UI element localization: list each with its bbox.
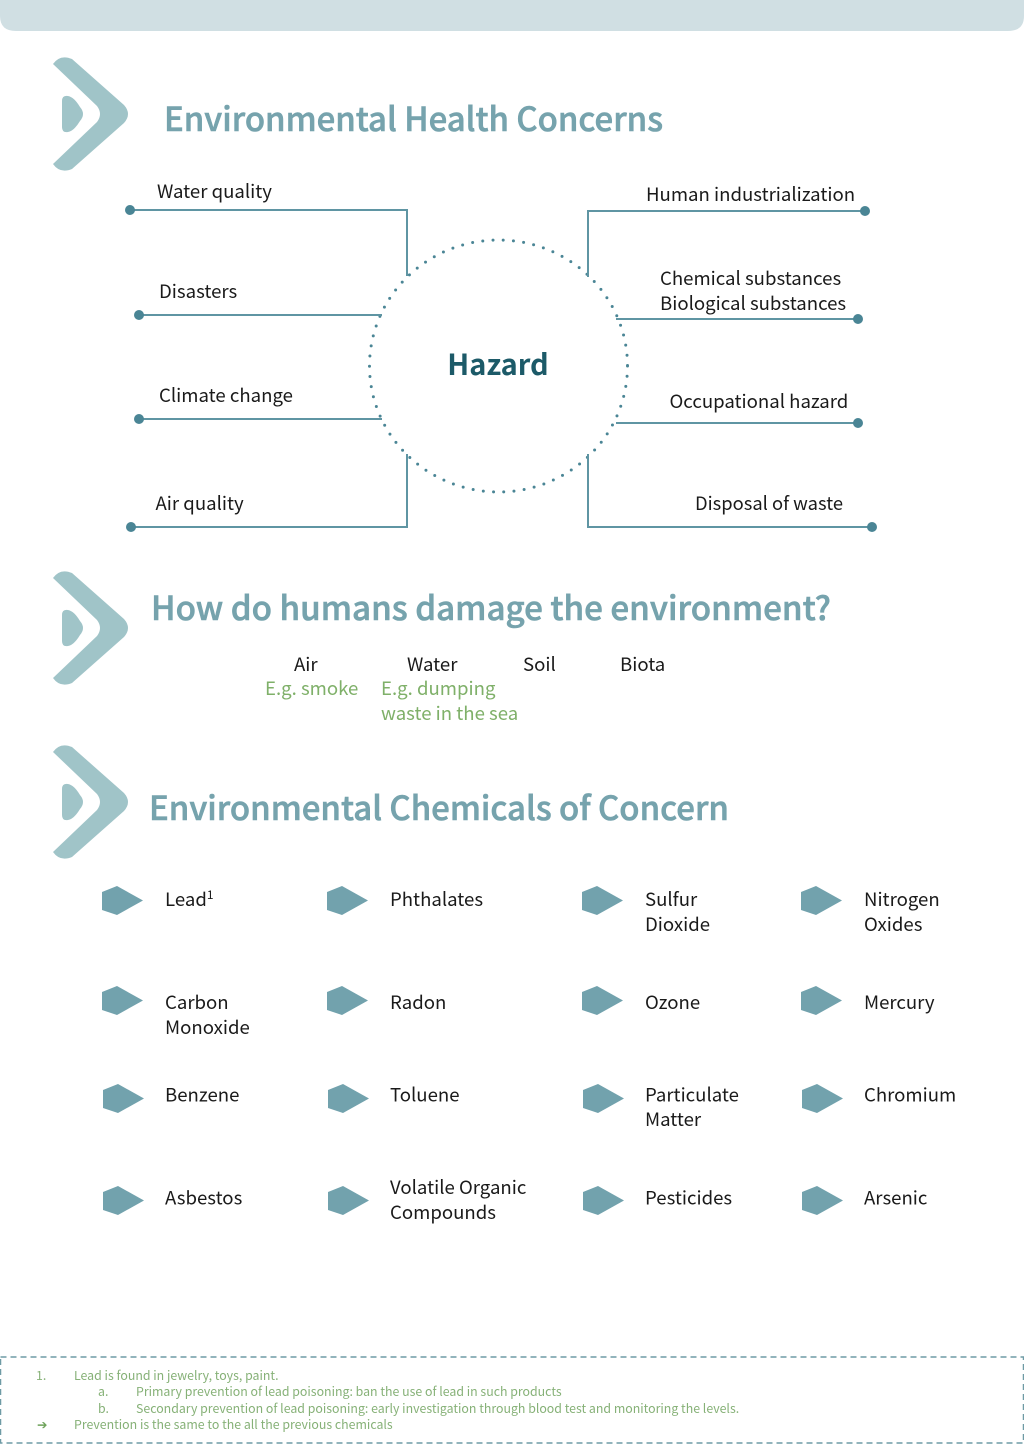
item: Water: Water bbox=[407, 650, 458, 677]
chemical: Ozone bbox=[582, 986, 700, 1015]
chemical: Chromium bbox=[802, 1080, 956, 1113]
item: Water: E.g. dumping bbox=[381, 674, 496, 701]
dotted circle bbox=[370, 240, 628, 492]
chemical: Phthalates: Phthalates bbox=[390, 885, 483, 912]
connector: Chemical and biological substances: Chemical substances bbox=[660, 264, 841, 291]
item: Air: E.g. smoke bbox=[265, 674, 358, 701]
connector: Disasters bbox=[134, 277, 382, 320]
item: Air bbox=[265, 650, 358, 701]
chemicals grid bbox=[102, 885, 956, 1225]
chemical: Carbon Monoxide: Monoxide bbox=[165, 1013, 250, 1040]
connector: Occupational hazard: Occupational hazard bbox=[670, 387, 848, 414]
chemical: Pesticides: Pesticides bbox=[645, 1184, 732, 1210]
chemical: Pesticides bbox=[583, 1184, 732, 1215]
connector: Air quality: Air quality bbox=[156, 489, 244, 516]
chemical: Asbestos bbox=[103, 1184, 243, 1215]
footnote box: Lead is found in jewelry, toys, paint. bbox=[74, 1366, 279, 1384]
chemical: Carbon Monoxide bbox=[102, 986, 250, 1040]
connector: Human industrialization bbox=[588, 180, 870, 277]
footnote box: 1. bbox=[36, 1366, 46, 1384]
chemical: Phthalates bbox=[327, 885, 483, 915]
chemical: Lead: 1 bbox=[207, 886, 214, 903]
chemical: Particulate Matter: Matter bbox=[645, 1105, 702, 1132]
title: Environmental Health Concerns: Environmental Health Concerns bbox=[164, 93, 663, 141]
heading: How do humans damage the environment?: How do humans damage the environment? bbox=[151, 582, 831, 630]
chemical: Nitrogen Oxides bbox=[801, 885, 940, 937]
connector: Water quality: Water quality bbox=[157, 177, 272, 204]
footnote box: ➔ bbox=[37, 1415, 47, 1433]
chemical: Ozone: Ozone bbox=[645, 988, 700, 1015]
chemical: Lead bbox=[102, 885, 214, 915]
connector: Water quality bbox=[125, 177, 407, 276]
chemical: Toluene bbox=[328, 1080, 460, 1113]
chemical: Nitrogen Oxides: Oxides bbox=[864, 910, 923, 937]
footnote box: Prevention is the same to the all the previous chemicals bbox=[74, 1415, 393, 1433]
chemical: Sulfur Dioxide: Sulfur bbox=[645, 885, 698, 912]
connector: Climate change: Climate change bbox=[159, 381, 293, 408]
connector: Disposal of waste bbox=[588, 454, 877, 532]
label: Hazard: Hazard bbox=[447, 342, 549, 384]
chemical: Particulate Matter: Particulate bbox=[645, 1080, 739, 1108]
footnote box: Primary prevention of lead poisoning: ban the use of lead in such products bbox=[136, 1382, 562, 1400]
section 1 icon: chevron bbox=[53, 57, 128, 171]
chemical: Lead: Lead bbox=[165, 885, 207, 912]
chemical: Benzene bbox=[103, 1080, 239, 1113]
media list bbox=[265, 650, 665, 726]
chemical: Radon: Radon bbox=[390, 988, 446, 1015]
connector: Disposal of waste: Disposal of waste bbox=[695, 489, 843, 516]
item: Water: waste in the sea bbox=[381, 699, 518, 726]
chemical: Mercury bbox=[801, 986, 935, 1015]
chemical: Volatile Organic Compounds bbox=[328, 1173, 526, 1225]
connector: Climate change bbox=[134, 381, 382, 424]
chemical: Radon bbox=[327, 986, 446, 1015]
chemical: Particulate Matter bbox=[583, 1080, 739, 1132]
item: Soil: Soil bbox=[523, 650, 556, 677]
chemical: Mercury: Mercury bbox=[864, 988, 935, 1015]
footnote box: a. bbox=[98, 1382, 108, 1400]
footnote box: Secondary prevention of lead poisoning: early investigation through blood test and monitoring the levels. bbox=[136, 1399, 739, 1417]
connector: Chemical and biological substances bbox=[616, 264, 863, 324]
item: Water bbox=[381, 650, 518, 726]
item: Biota: Biota bbox=[620, 650, 665, 677]
footnote box bbox=[0, 1357, 1024, 1443]
chemical: Asbestos: Asbestos bbox=[165, 1184, 243, 1210]
section 2 icon: chevron bbox=[53, 571, 128, 685]
connector: Human industrialization: Human industrialization bbox=[646, 180, 855, 207]
chemical: Nitrogen Oxides: Nitrogen bbox=[864, 885, 940, 912]
chemical: Sulfur Dioxide bbox=[582, 885, 710, 937]
chemical: Sulfur Dioxide: Dioxide bbox=[645, 910, 710, 937]
footnote box: b. bbox=[98, 1399, 109, 1417]
connector: Disasters: Disasters bbox=[159, 277, 238, 304]
chemical: Toluene: Toluene bbox=[390, 1080, 460, 1108]
chemical: Volatile Organic Compounds: Compounds bbox=[390, 1198, 496, 1225]
diagram: hazard bbox=[125, 177, 877, 532]
heading: Environmental Chemicals of Concern: Environmental Chemicals of Concern bbox=[149, 782, 729, 830]
connector: Chemical and biological substances: Biological substances bbox=[660, 289, 846, 316]
section 3 icon: chevron bbox=[53, 745, 128, 859]
chemical: Carbon Monoxide: Carbon bbox=[165, 988, 229, 1015]
top banner bbox=[0, 0, 1024, 31]
item: Air: Air bbox=[294, 650, 318, 677]
chemical: Arsenic: Arsenic bbox=[864, 1184, 927, 1210]
chemical: Benzene: Benzene bbox=[165, 1080, 239, 1108]
connector: Air quality bbox=[126, 454, 407, 532]
chemical: Volatile Organic Compounds: Volatile Organic bbox=[390, 1173, 526, 1200]
chemical: Chromium: Chromium bbox=[864, 1080, 956, 1108]
chemical: Arsenic bbox=[802, 1184, 927, 1215]
connector: Occupational hazard bbox=[616, 387, 863, 428]
